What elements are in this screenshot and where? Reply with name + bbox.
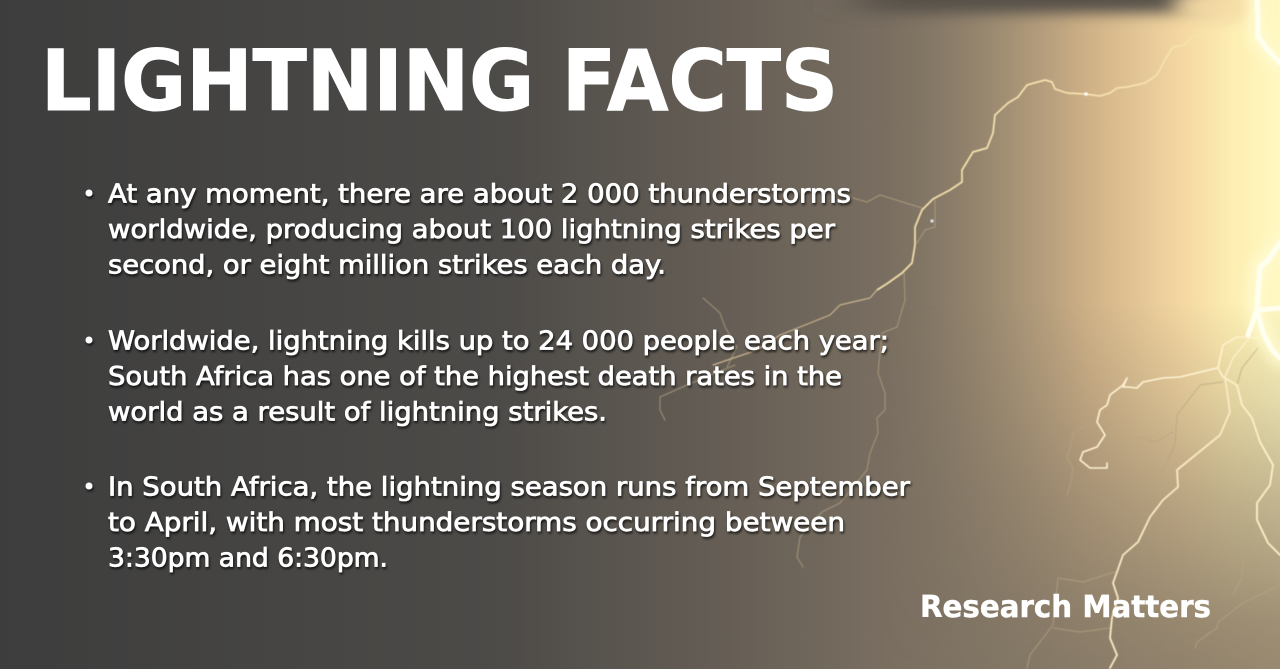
storm sky background bbox=[314, 0, 1280, 669]
lower main branches bbox=[1218, 337, 1280, 555]
bullet 2: deaths from lightning: South Africa has one of the highest death rates in the bbox=[108, 362, 842, 392]
bullet 3: lightning season: 3:30pm and 6:30pm. bbox=[108, 544, 388, 574]
bullet 1: thunderstorm frequency: At any moment, there are about 2 000 thunderstorms bbox=[108, 180, 851, 210]
lower left branch bbox=[1080, 368, 1217, 468]
bullet 1: thunderstorm frequency: second, or eight million strikes each day. bbox=[108, 250, 666, 280]
bright bolt core bbox=[1248, 0, 1280, 358]
bullet 3: lightning season: In South Africa, the lightning season runs from September bbox=[108, 472, 911, 502]
bullet list bbox=[86, 180, 911, 574]
bullet 1: thunderstorm frequency: worldwide, producing about 100 lightning strikes per bbox=[108, 215, 836, 245]
bullet 1: thunderstorm frequency bbox=[86, 180, 851, 280]
bullet 2: deaths from lightning bbox=[86, 326, 889, 428]
bullet 2: deaths from lightning: world as a result of lightning strikes. bbox=[108, 398, 607, 428]
source label: Research Matters: Research Matters bbox=[920, 590, 1211, 625]
title: LIGHTNING FACTS bbox=[41, 32, 838, 130]
lightning bolts bbox=[660, 0, 1280, 668]
upper bolt bbox=[877, 22, 1233, 290]
faint branches bbox=[660, 195, 1280, 668]
bullet 3: lightning season bbox=[86, 472, 911, 574]
bullet 2: deaths from lightning: Worldwide, lightning kills up to 24 000 people each year; bbox=[108, 326, 889, 356]
bullet 3: lightning season: to April, with most thunderstorms occurring between bbox=[108, 508, 845, 538]
bright bolt core glow bbox=[1257, 0, 1280, 358]
